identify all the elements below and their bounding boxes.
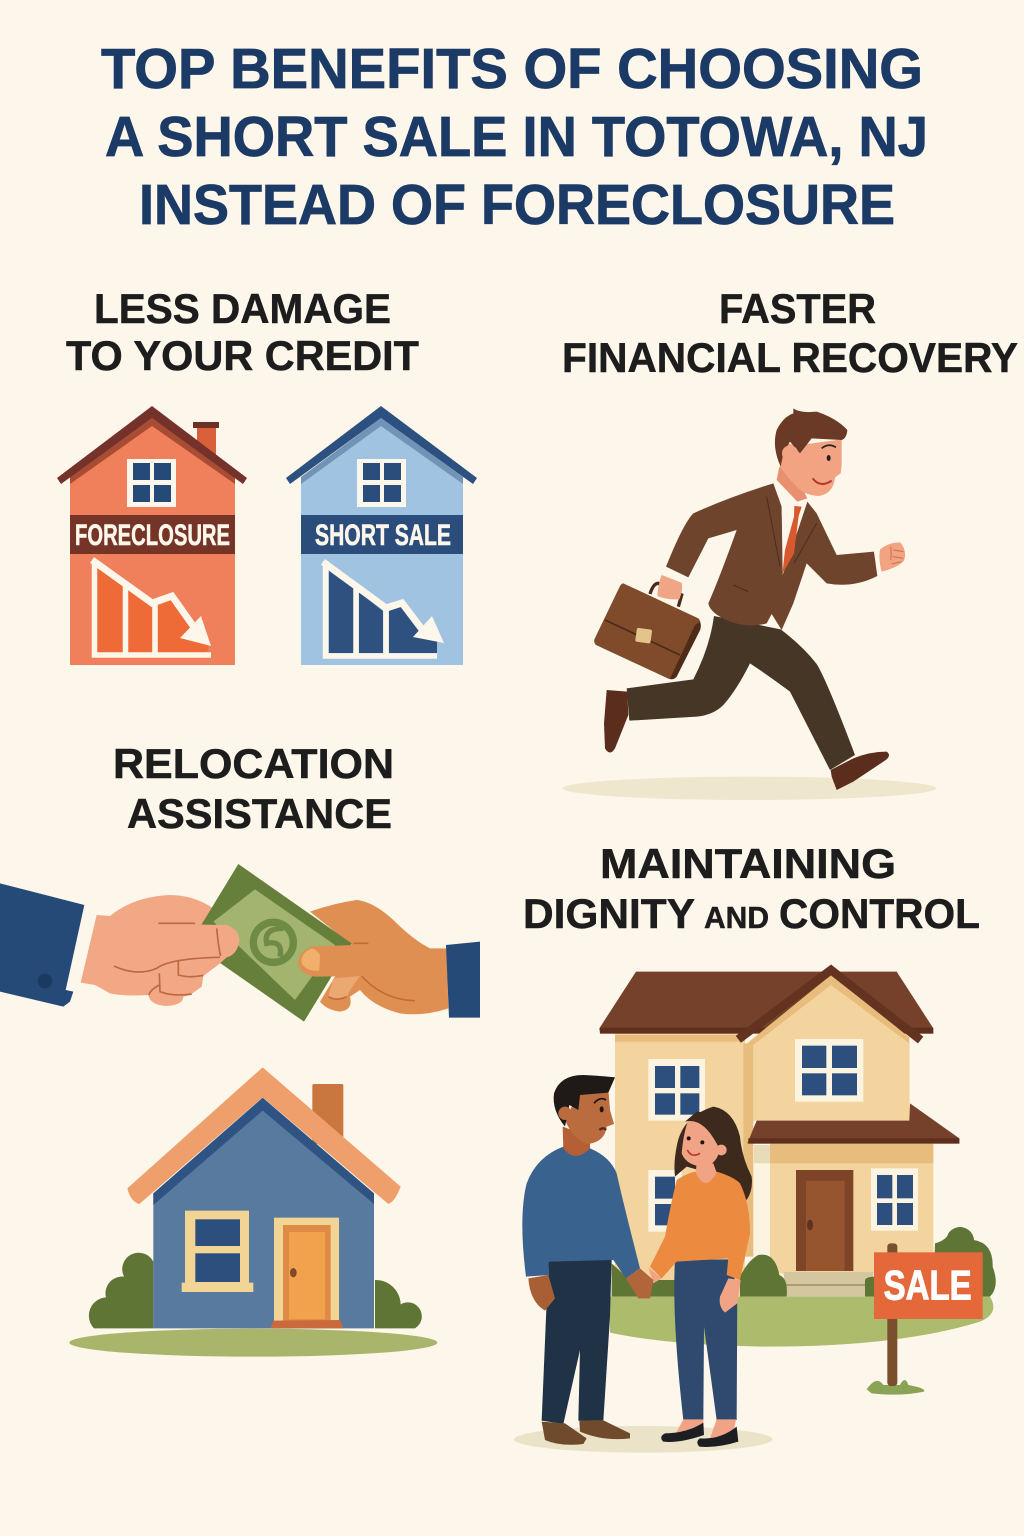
left thumb and fingers	[113, 924, 239, 995]
lawn	[610, 1297, 993, 1347]
icon: briefcase	[594, 583, 701, 679]
illustration: hands exchanging money	[0, 864, 480, 1022]
front gable	[745, 975, 909, 1121]
icon: foreclosure house	[57, 406, 247, 665]
pants	[627, 616, 855, 770]
woman	[626, 1107, 752, 1447]
shrubs	[612, 1263, 677, 1297]
chart: short sale decline	[323, 561, 444, 656]
left hand	[81, 895, 222, 1006]
heading: relocation assistance: RELOCATION	[113, 740, 394, 787]
banknote	[191, 864, 352, 1022]
clasped hands	[648, 1267, 662, 1283]
heading: less damage to your credit: LESS DAMAGE	[94, 285, 391, 332]
couple shadow	[514, 1426, 773, 1453]
title: INSTEAD OF FORECLOSURE	[139, 173, 895, 237]
heading: faster financial recovery: FINANCIAL RECOVERY	[562, 334, 1018, 381]
label: foreclosure: FORECLOSURE	[75, 519, 230, 552]
title: TOP BENEFITS OF CHOOSING	[101, 37, 923, 101]
heading: maintaining dignity and control	[523, 840, 980, 937]
steps	[783, 1272, 873, 1297]
heading: relocation assistance: ASSISTANCE	[127, 790, 392, 837]
bushes behind	[933, 1227, 996, 1297]
title: A SHORT SALE IN TOTOWA, NJ	[105, 105, 928, 169]
window	[182, 1211, 253, 1292]
house walls	[615, 1033, 745, 1297]
sale sign	[867, 1243, 983, 1395]
front door	[796, 1170, 853, 1271]
front hand	[874, 551, 882, 573]
illustration: couple in front of house with sale sign	[514, 970, 996, 1453]
walls	[153, 1098, 374, 1328]
head	[777, 467, 807, 502]
man	[522, 1075, 640, 1445]
heading: maintaining dignity and control: MAINTAINING	[600, 840, 896, 887]
heading: faster financial recovery: FASTER	[719, 285, 876, 332]
illustration: running businessman	[563, 408, 936, 800]
heading: maintaining dignity and control: AND	[704, 900, 769, 935]
label: sale: SALE	[884, 1263, 972, 1309]
rear hand and cuff	[657, 575, 682, 599]
title	[101, 37, 928, 237]
chart: foreclosure decline	[92, 560, 211, 655]
roof	[127, 1067, 401, 1204]
porch roof	[747, 1103, 959, 1143]
icon: short sale house	[286, 406, 477, 665]
right hand behind	[310, 900, 448, 1014]
heading: maintaining dignity and control: CONTROL	[779, 890, 980, 937]
left sleeve	[0, 883, 84, 1007]
heading: faster financial recovery	[562, 285, 1018, 381]
label: short sale: SHORT SALE	[315, 519, 451, 552]
heading: maintaining dignity and control: DIGNITY	[523, 890, 695, 937]
heading: less damage to your credit	[66, 285, 419, 379]
main roof	[599, 972, 933, 1033]
ground	[69, 1329, 437, 1357]
illustration: blue house	[69, 1067, 437, 1357]
heading: less damage to your credit: TO YOUR CREDIT	[66, 332, 419, 379]
shirt and tie	[774, 479, 807, 575]
heading: relocation assistance	[113, 740, 394, 837]
windows	[648, 1039, 918, 1232]
right cuff	[446, 942, 480, 1018]
jacket	[666, 483, 877, 630]
door	[271, 1218, 343, 1328]
right thumb	[298, 945, 362, 977]
